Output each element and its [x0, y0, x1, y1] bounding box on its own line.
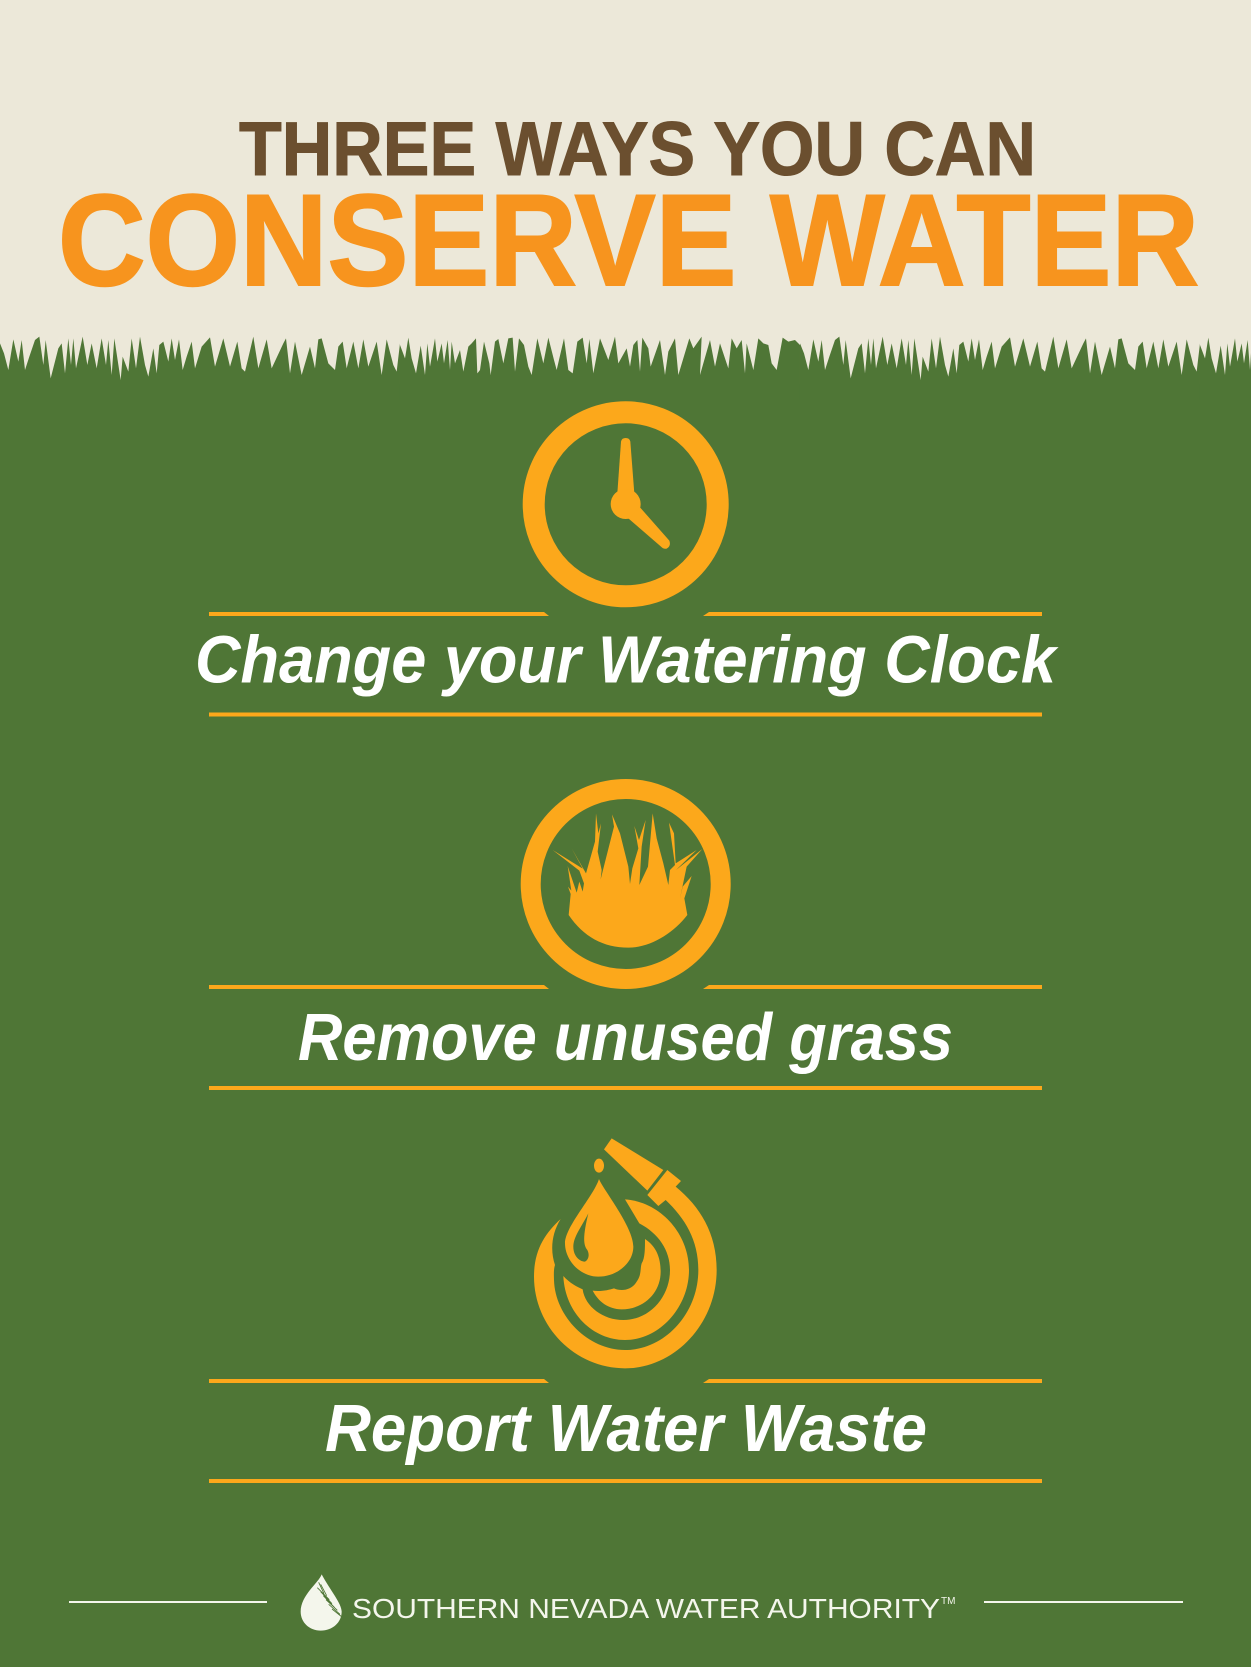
label: change your watering clock: Change your Watering Clock — [195, 622, 1060, 698]
label: remove unused grass: Remove unused grass — [298, 1000, 953, 1075]
title — [58, 107, 1199, 313]
rule below: remove unused grass — [209, 1086, 1042, 1090]
title line: three ways: THREE WAYS YOU CAN — [239, 107, 1036, 192]
rule above: change your watering clock — [209, 612, 1042, 616]
footer — [69, 1574, 1183, 1631]
rule below: report water waste — [209, 1479, 1042, 1483]
rule above: report water waste — [209, 1379, 1042, 1383]
organization name: SOUTHERN NEVADA WATER AUTHORITY — [352, 1593, 940, 1624]
rule above: remove unused grass — [209, 985, 1042, 989]
background: cream sky — [0, 0, 1251, 385]
title line: conserve water: CONSERVE WATER — [58, 167, 1199, 313]
icon: water authority logo drop — [301, 1574, 342, 1631]
label: report water waste: Report Water Waste — [325, 1391, 927, 1466]
icon: clock — [534, 412, 718, 596]
background: green lawn — [0, 384, 1251, 1667]
rule below: change your watering clock — [209, 712, 1042, 716]
grass edge — [0, 337, 1251, 400]
icon: grass — [531, 789, 721, 979]
icon: hose and water drop — [534, 1138, 717, 1368]
trademark: TM — [941, 1596, 955, 1607]
